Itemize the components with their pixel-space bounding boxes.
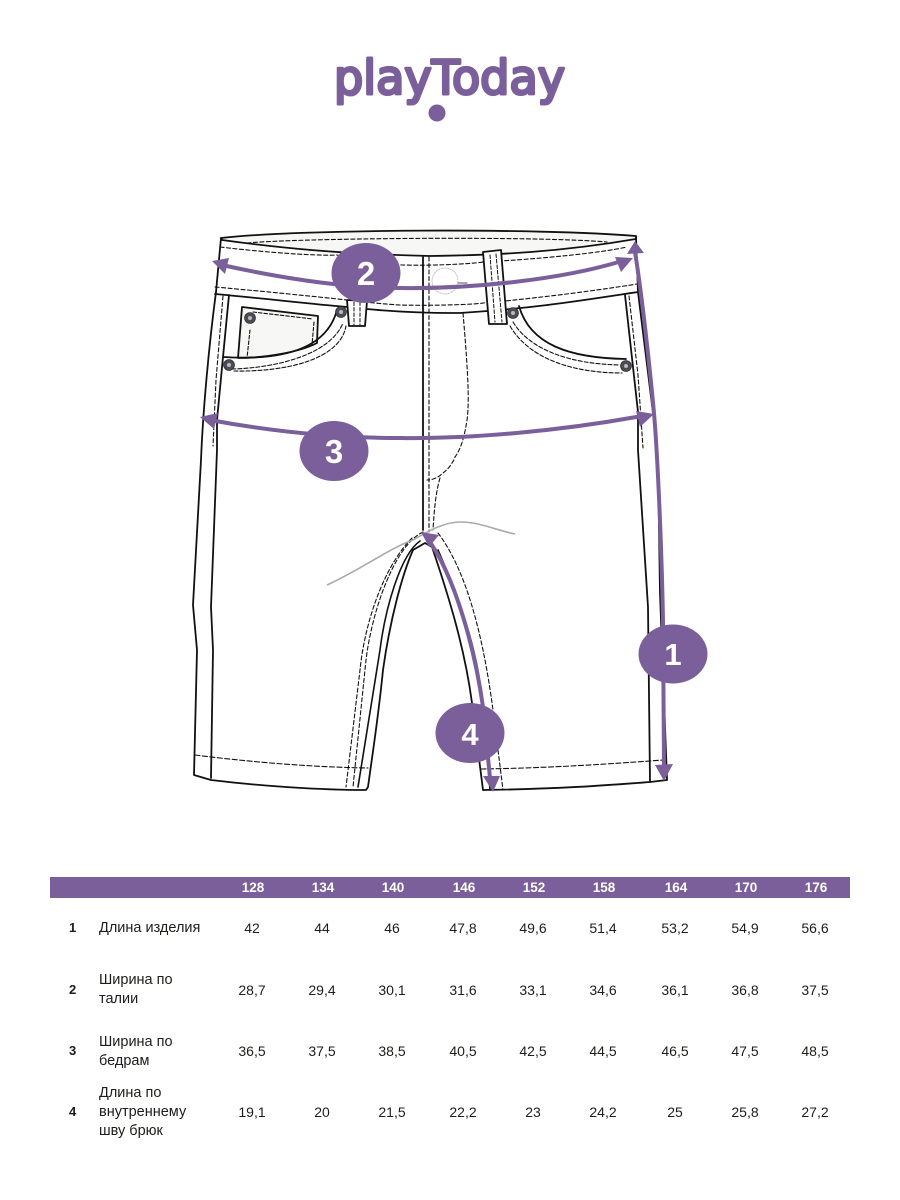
inseam stitches xyxy=(358,541,420,787)
measure 4: inseam length arrow xyxy=(421,532,504,792)
row 1: garment length: 44 xyxy=(314,920,330,936)
row 1: garment length xyxy=(69,920,829,936)
row 1: garment length: 51,4 xyxy=(589,920,617,936)
row 1: garment length: 49,6 xyxy=(519,920,547,936)
row 2: waist width: 34,6 xyxy=(589,982,617,998)
row 3: hip width: Ширина по xyxy=(99,1034,173,1050)
measure 1: garment length arrow xyxy=(627,241,708,781)
shorts technical drawing xyxy=(193,231,667,790)
row 4: inseam length: внутреннему xyxy=(99,1104,186,1120)
logo: playToday xyxy=(334,51,565,106)
row 2: waist width: талии xyxy=(99,991,138,1007)
row 3: hip width: 36,5 xyxy=(238,1043,266,1059)
table header sizes: 176 xyxy=(805,880,827,895)
row 1: garment length: 46 xyxy=(384,920,400,936)
row 1: garment length: 56,6 xyxy=(801,920,829,936)
rivets xyxy=(224,306,632,372)
row 3: hip width: бедрам xyxy=(99,1053,149,1069)
table header sizes xyxy=(242,880,827,895)
hem stitches xyxy=(195,755,663,769)
waist button and label xyxy=(432,268,458,294)
row 4: inseam length: 24,2 xyxy=(589,1104,617,1120)
row 1: garment length: 42 xyxy=(244,920,260,936)
row 3: hip width: 47,5 xyxy=(731,1043,759,1059)
table header sizes: 128 xyxy=(242,880,264,895)
right pocket opening xyxy=(519,306,626,359)
outer silhouette xyxy=(193,237,667,790)
left pocket opening xyxy=(223,310,337,358)
row 3: hip width: 40,5 xyxy=(449,1043,477,1059)
right belt loop xyxy=(483,250,507,324)
row 2: waist width: 29,4 xyxy=(308,982,336,998)
row 2: waist width: 2 xyxy=(69,982,76,997)
row 4: inseam length: 4 xyxy=(69,1104,76,1119)
row 4: inseam length: 23 xyxy=(525,1104,541,1120)
row 2: waist width: 33,1 xyxy=(519,982,547,998)
row 4: inseam length: шву брюк xyxy=(99,1123,163,1139)
measure 2: waist width arrow xyxy=(212,243,633,303)
size table xyxy=(50,877,850,1139)
row 2: waist width: 36,1 xyxy=(661,982,689,998)
row 3: hip width: 48,5 xyxy=(801,1043,829,1059)
table header sizes: 134 xyxy=(312,880,334,895)
row 2: waist width: 28,7 xyxy=(238,982,266,998)
left belt loop xyxy=(347,300,367,326)
row 3: hip width: 46,5 xyxy=(661,1043,689,1059)
row 4: inseam length: 19,1 xyxy=(238,1104,266,1120)
waistband inner area xyxy=(221,231,636,256)
fly xyxy=(422,257,424,530)
waist lower edge xyxy=(215,292,638,313)
row 1: garment length: 53,2 xyxy=(661,920,689,936)
row 3: hip width: 3 xyxy=(69,1043,76,1058)
measure 3: hip width arrow: 3 xyxy=(325,433,343,470)
row 1: garment length: 54,9 xyxy=(731,920,759,936)
table header bar xyxy=(50,877,850,898)
table header sizes: 164 xyxy=(665,880,687,895)
row 4: inseam length: 25 xyxy=(667,1104,683,1120)
row 3: hip width: 37,5 xyxy=(308,1043,336,1059)
table header sizes: 146 xyxy=(453,880,475,895)
table header sizes: 170 xyxy=(735,880,757,895)
row 1: garment length: Длина изделия xyxy=(99,920,200,936)
measure 2: waist width arrow: 2 xyxy=(357,255,375,292)
table header sizes: 152 xyxy=(523,880,545,895)
row 2: waist width: Ширина по xyxy=(99,972,173,988)
left side seams xyxy=(211,295,229,778)
row 4: inseam length: 21,5 xyxy=(378,1104,406,1120)
table header sizes: 140 xyxy=(382,880,404,895)
row 1: garment length: 1 xyxy=(69,920,76,935)
row 2: waist width: 30,1 xyxy=(378,982,406,998)
row 4: inseam length: 27,2 xyxy=(801,1104,829,1120)
row 3: hip width: 42,5 xyxy=(519,1043,547,1059)
row 3: hip width: 38,5 xyxy=(378,1043,406,1059)
row 1: garment length: 47,8 xyxy=(449,920,477,936)
row 2: waist width: 31,6 xyxy=(449,982,477,998)
left pocket xyxy=(238,307,318,358)
row 4: inseam length: 20 xyxy=(314,1104,330,1120)
row 4: inseam length: 22,2 xyxy=(449,1104,477,1120)
measure 3: hip width arrow xyxy=(200,411,654,481)
table header sizes: 158 xyxy=(593,880,615,895)
row 3: hip width: 44,5 xyxy=(589,1043,617,1059)
grey crease line xyxy=(327,522,515,585)
measure 4: inseam length arrow: 4 xyxy=(461,717,479,752)
measure 1: garment length arrow: 1 xyxy=(664,637,682,672)
row 2: waist width: 36,8 xyxy=(731,982,759,998)
row 2: waist width: 37,5 xyxy=(801,982,829,998)
waist dashed stitches xyxy=(215,238,637,305)
row 4: inseam length: Длина по xyxy=(99,1085,161,1101)
row 4: inseam length: 25,8 xyxy=(731,1104,759,1120)
